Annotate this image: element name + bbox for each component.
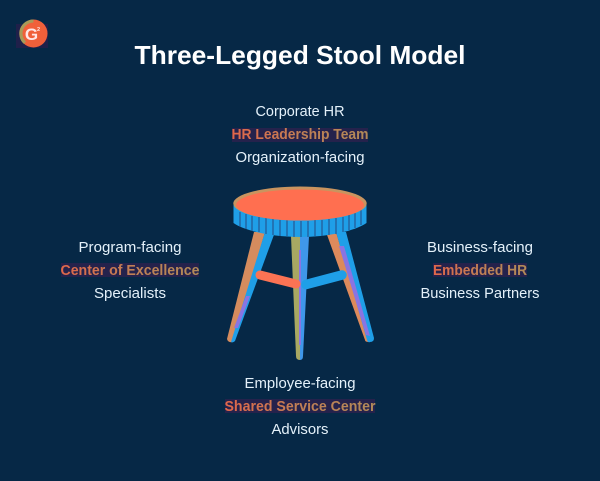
right crossbar: [306, 275, 342, 284]
text block: program-facing: [60, 240, 200, 302]
text block: corporate HR: HR Leadership Team: [232, 127, 368, 143]
text block: business-facing: Embedded HR: [433, 263, 528, 279]
left crossbar: [260, 275, 296, 284]
left leg: [227, 232, 275, 342]
logo: G2 badge: G: [25, 25, 38, 44]
text block: employee-facing: Shared Service Center: [224, 399, 376, 415]
stool illustration: [227, 186, 374, 360]
seat side: [234, 204, 366, 237]
logo: G2 badge: [16, 19, 48, 48]
text block: business-facing: [420, 240, 540, 302]
text block: program-facing: Program-facing: [78, 240, 182, 256]
text block: program-facing: Center of Excellence: [60, 263, 200, 279]
text block: business-facing: Business Partners: [420, 286, 540, 302]
logo: G2 badge: 2: [37, 27, 40, 33]
title: Three-Legged Stool Model: [134, 40, 465, 70]
text block: employee-facing: Advisors: [272, 422, 328, 438]
text block: business-facing: Business-facing: [427, 240, 533, 256]
center leg: [291, 236, 309, 360]
text block: corporate HR: Corporate HR: [256, 104, 344, 120]
text block: corporate HR: [232, 104, 368, 166]
text block: program-facing: Specialists: [94, 286, 166, 302]
text block: employee-facing: [224, 376, 376, 438]
seat top: [233, 186, 367, 220]
text block: corporate HR: Organization-facing: [236, 150, 364, 166]
right leg: [326, 232, 374, 342]
text block: employee-facing: Employee-facing: [244, 376, 356, 392]
